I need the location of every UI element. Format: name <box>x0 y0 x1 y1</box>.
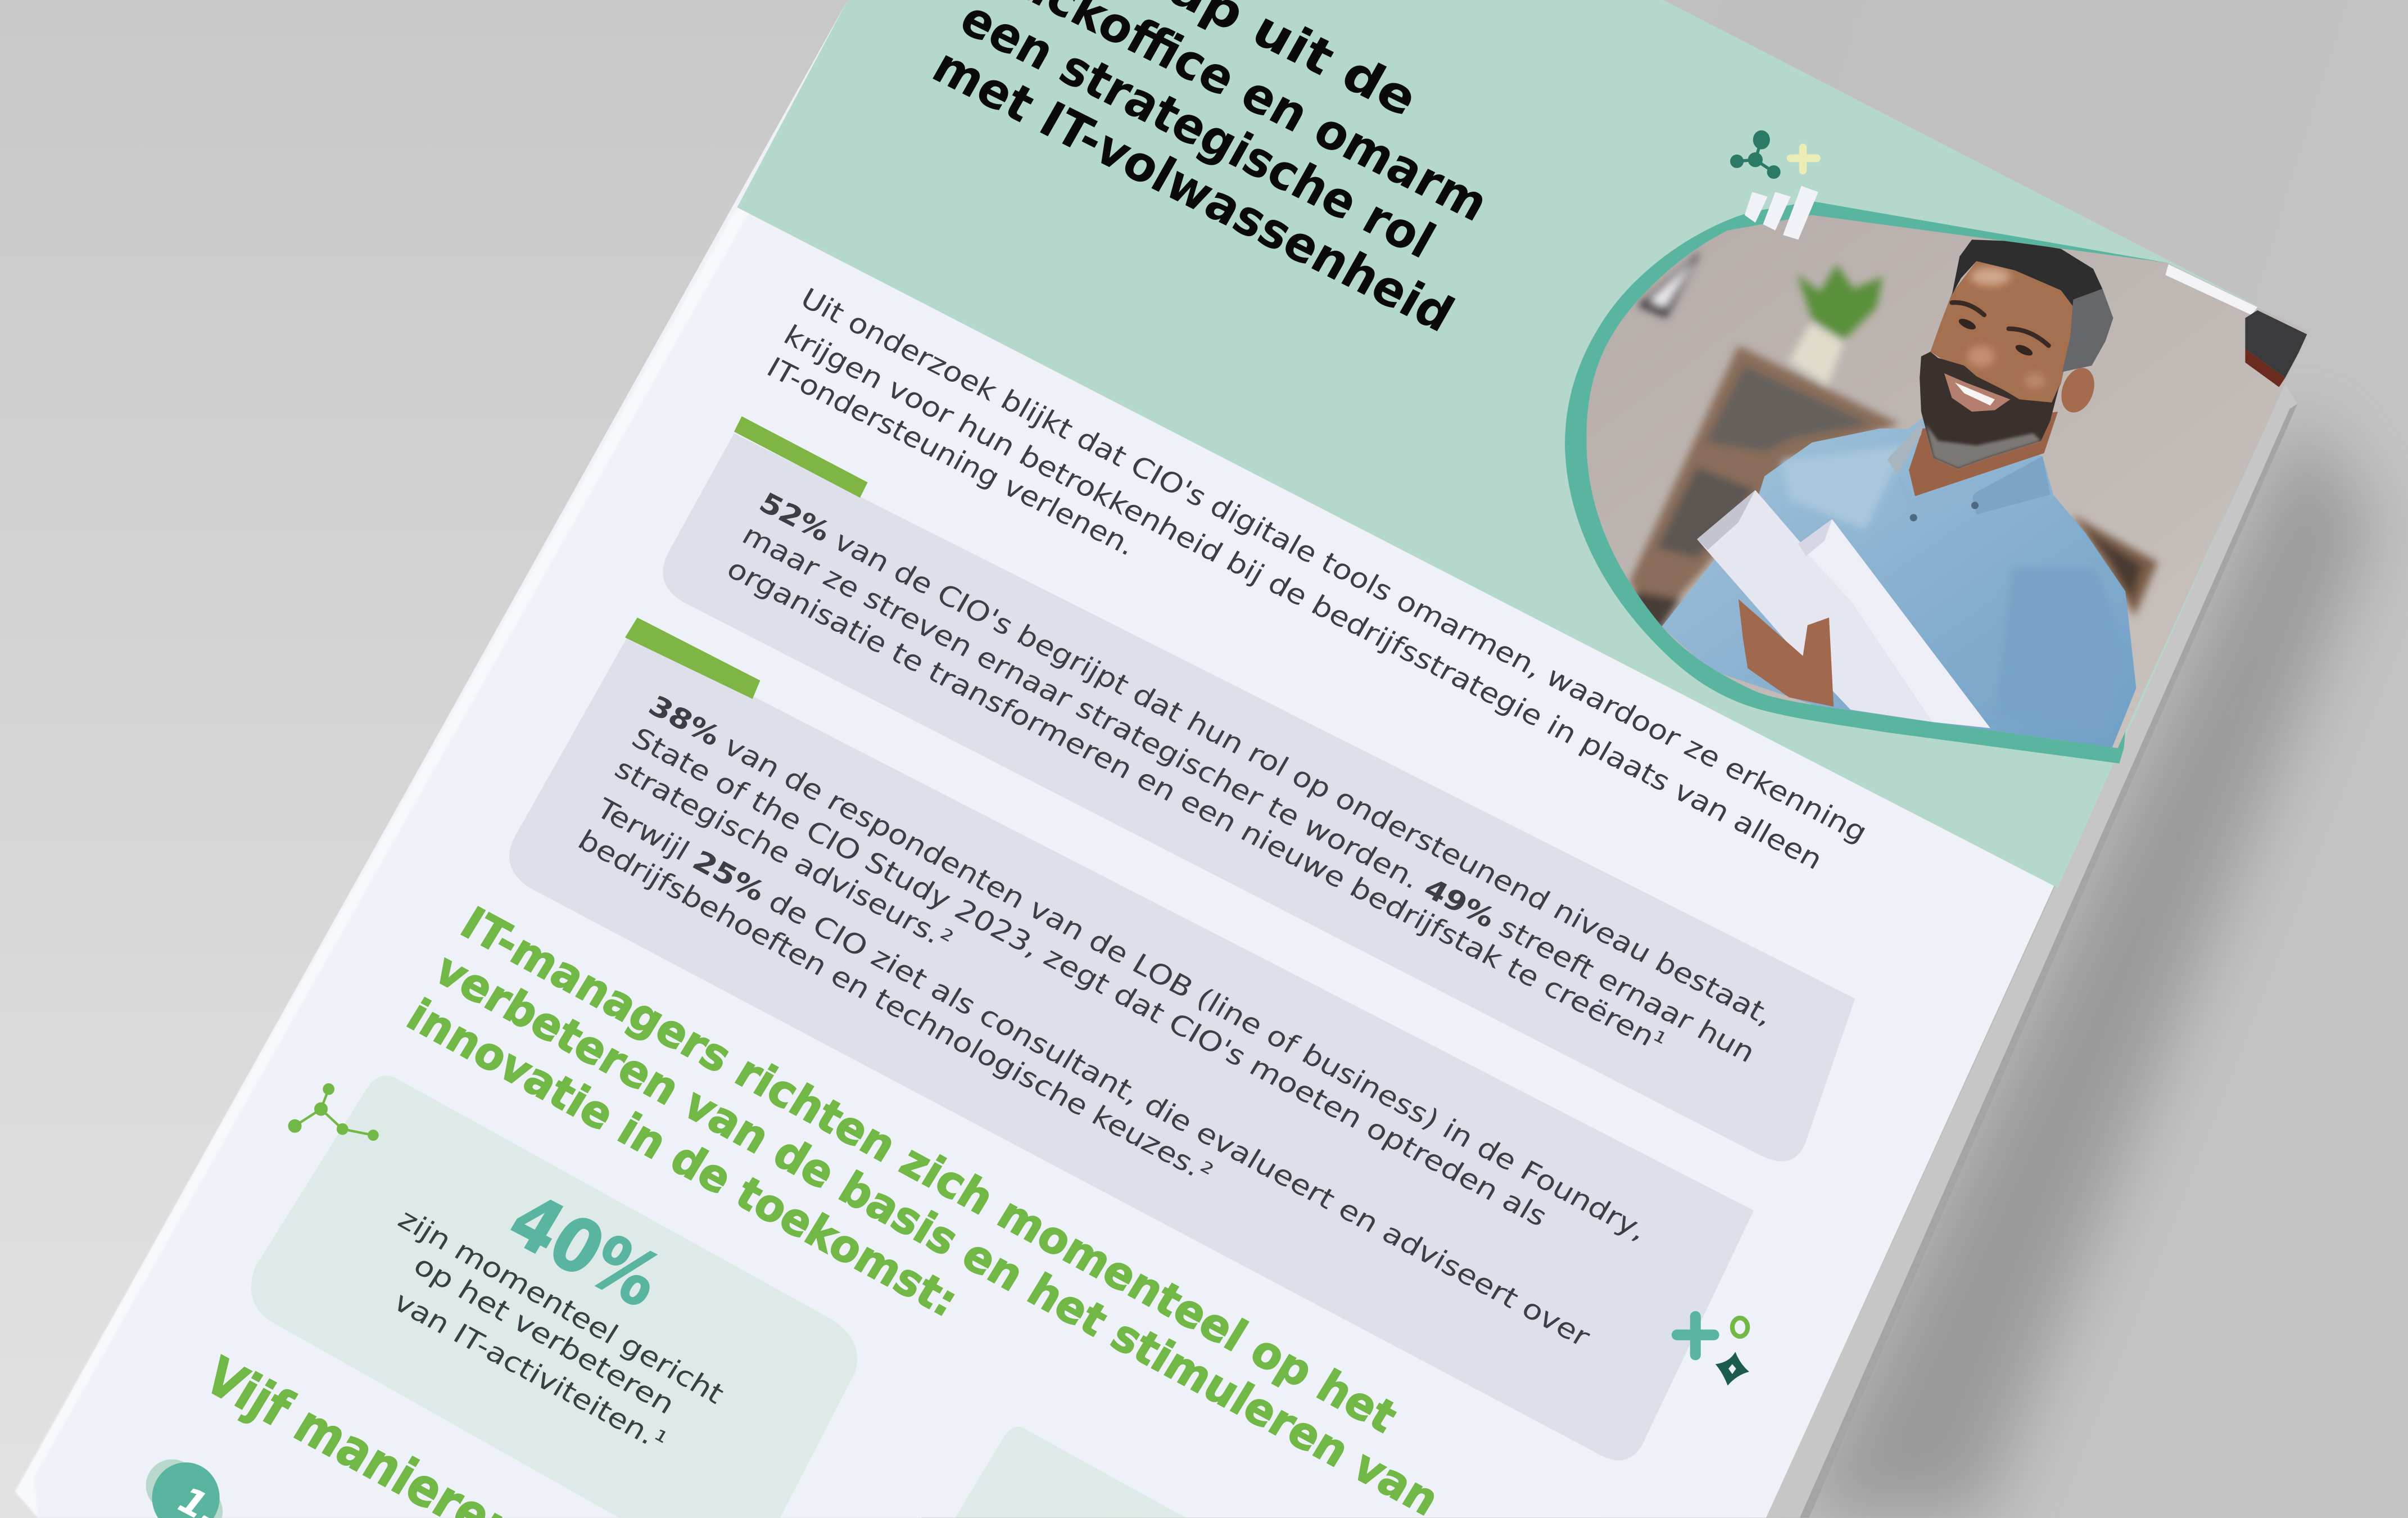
teeth <box>1955 382 1995 405</box>
stat text: 38% van de respondenten van de LOB (line of business) in de Foundry, <box>643 689 1653 1247</box>
big number: 40% <box>495 1177 676 1323</box>
green heading: IT-managers richten zich momenteel op het <box>452 897 1406 1443</box>
intro text: Uit onderzoek blijkt dat CIO's digitale tools omarmen, waardoor ze erkenning <box>795 282 1873 848</box>
icon: molecule green <box>289 1085 378 1140</box>
panel: second card <box>955 1427 1185 1517</box>
panel: stat box 38% <box>509 617 1754 1460</box>
icon: molecule dark green <box>1732 132 1779 177</box>
card text: van IT-activiteiten.¹ <box>388 1285 673 1457</box>
icon: pale plus <box>1791 147 1817 170</box>
page shadow <box>1797 415 2373 1517</box>
photo frame: teal outline <box>1565 201 2167 763</box>
panel: 40% card <box>251 1076 857 1517</box>
intro text: IT-ondersteuning verlenen. <box>762 351 1141 562</box>
icon: white bars <box>1745 186 1818 240</box>
icon: dark star <box>1716 1352 1749 1385</box>
icon: teal plus <box>1677 1317 1714 1355</box>
mouth <box>1944 373 2010 412</box>
card text: op het verbeteren <box>408 1249 681 1421</box>
intro text: krijgen voor hun betrokkenheid bij de bedrijfsstrategie in plaats van alleen <box>778 319 1828 876</box>
beard <box>1920 352 2060 468</box>
shirt shading <box>1777 446 2098 659</box>
card text: zijn momenteel gericht <box>392 1203 730 1410</box>
page edge highlight <box>15 207 749 1517</box>
top right corner objects <box>2165 264 2308 387</box>
number badge 1 <box>146 1460 230 1518</box>
stat text: strategische adviseurs.² <box>609 752 958 956</box>
panel: stat box 52% <box>663 416 1855 1162</box>
photo: smiling man holding rolled plans <box>1586 215 2308 748</box>
stat text: 52% van de CIO's begrijpt dat hun rol op ondersteunend niveau bestaat, <box>754 486 1779 1032</box>
hand <box>1739 599 1834 707</box>
stat text: State of the CIO Study 2023, zegt dat CIO's moeten optreden als <box>626 721 1553 1233</box>
accent bar <box>734 416 868 498</box>
collar <box>1888 421 1923 475</box>
hair <box>1952 240 2113 372</box>
stat text: maar ze streven ernaar strategischer te worden. 49% streeft ernaar hun <box>737 518 1761 1069</box>
eyes <box>1957 317 1977 332</box>
accent bar <box>625 617 760 699</box>
ear <box>2056 363 2100 417</box>
shirt <box>1662 418 2136 753</box>
face <box>1930 261 2075 405</box>
panel: green header <box>737 0 2307 888</box>
beard grey <box>1926 424 2041 468</box>
stat text: bedrijfsbehoeften en technologische keuzes.² <box>572 824 1219 1189</box>
icon: green ring <box>1732 1318 1748 1336</box>
page stack edge <box>1766 384 2297 1517</box>
eyebrows <box>1952 302 2049 346</box>
stat text <box>572 689 1653 1353</box>
title: met IT-volwassenheid <box>924 37 1463 344</box>
face highlights <box>1967 267 2045 388</box>
plans <box>1697 490 1932 722</box>
green heading: innovatie in de toekomst: <box>399 989 967 1327</box>
neck <box>1909 412 2058 496</box>
stat text: organisatie te transformeren en een nieuwe bedrijfstak te creëren¹ <box>722 552 1672 1058</box>
stat text: Terwijl 25% de CIO ziet als consultant, die evalueert en adviseert over <box>590 792 1596 1353</box>
card text <box>388 1203 730 1457</box>
